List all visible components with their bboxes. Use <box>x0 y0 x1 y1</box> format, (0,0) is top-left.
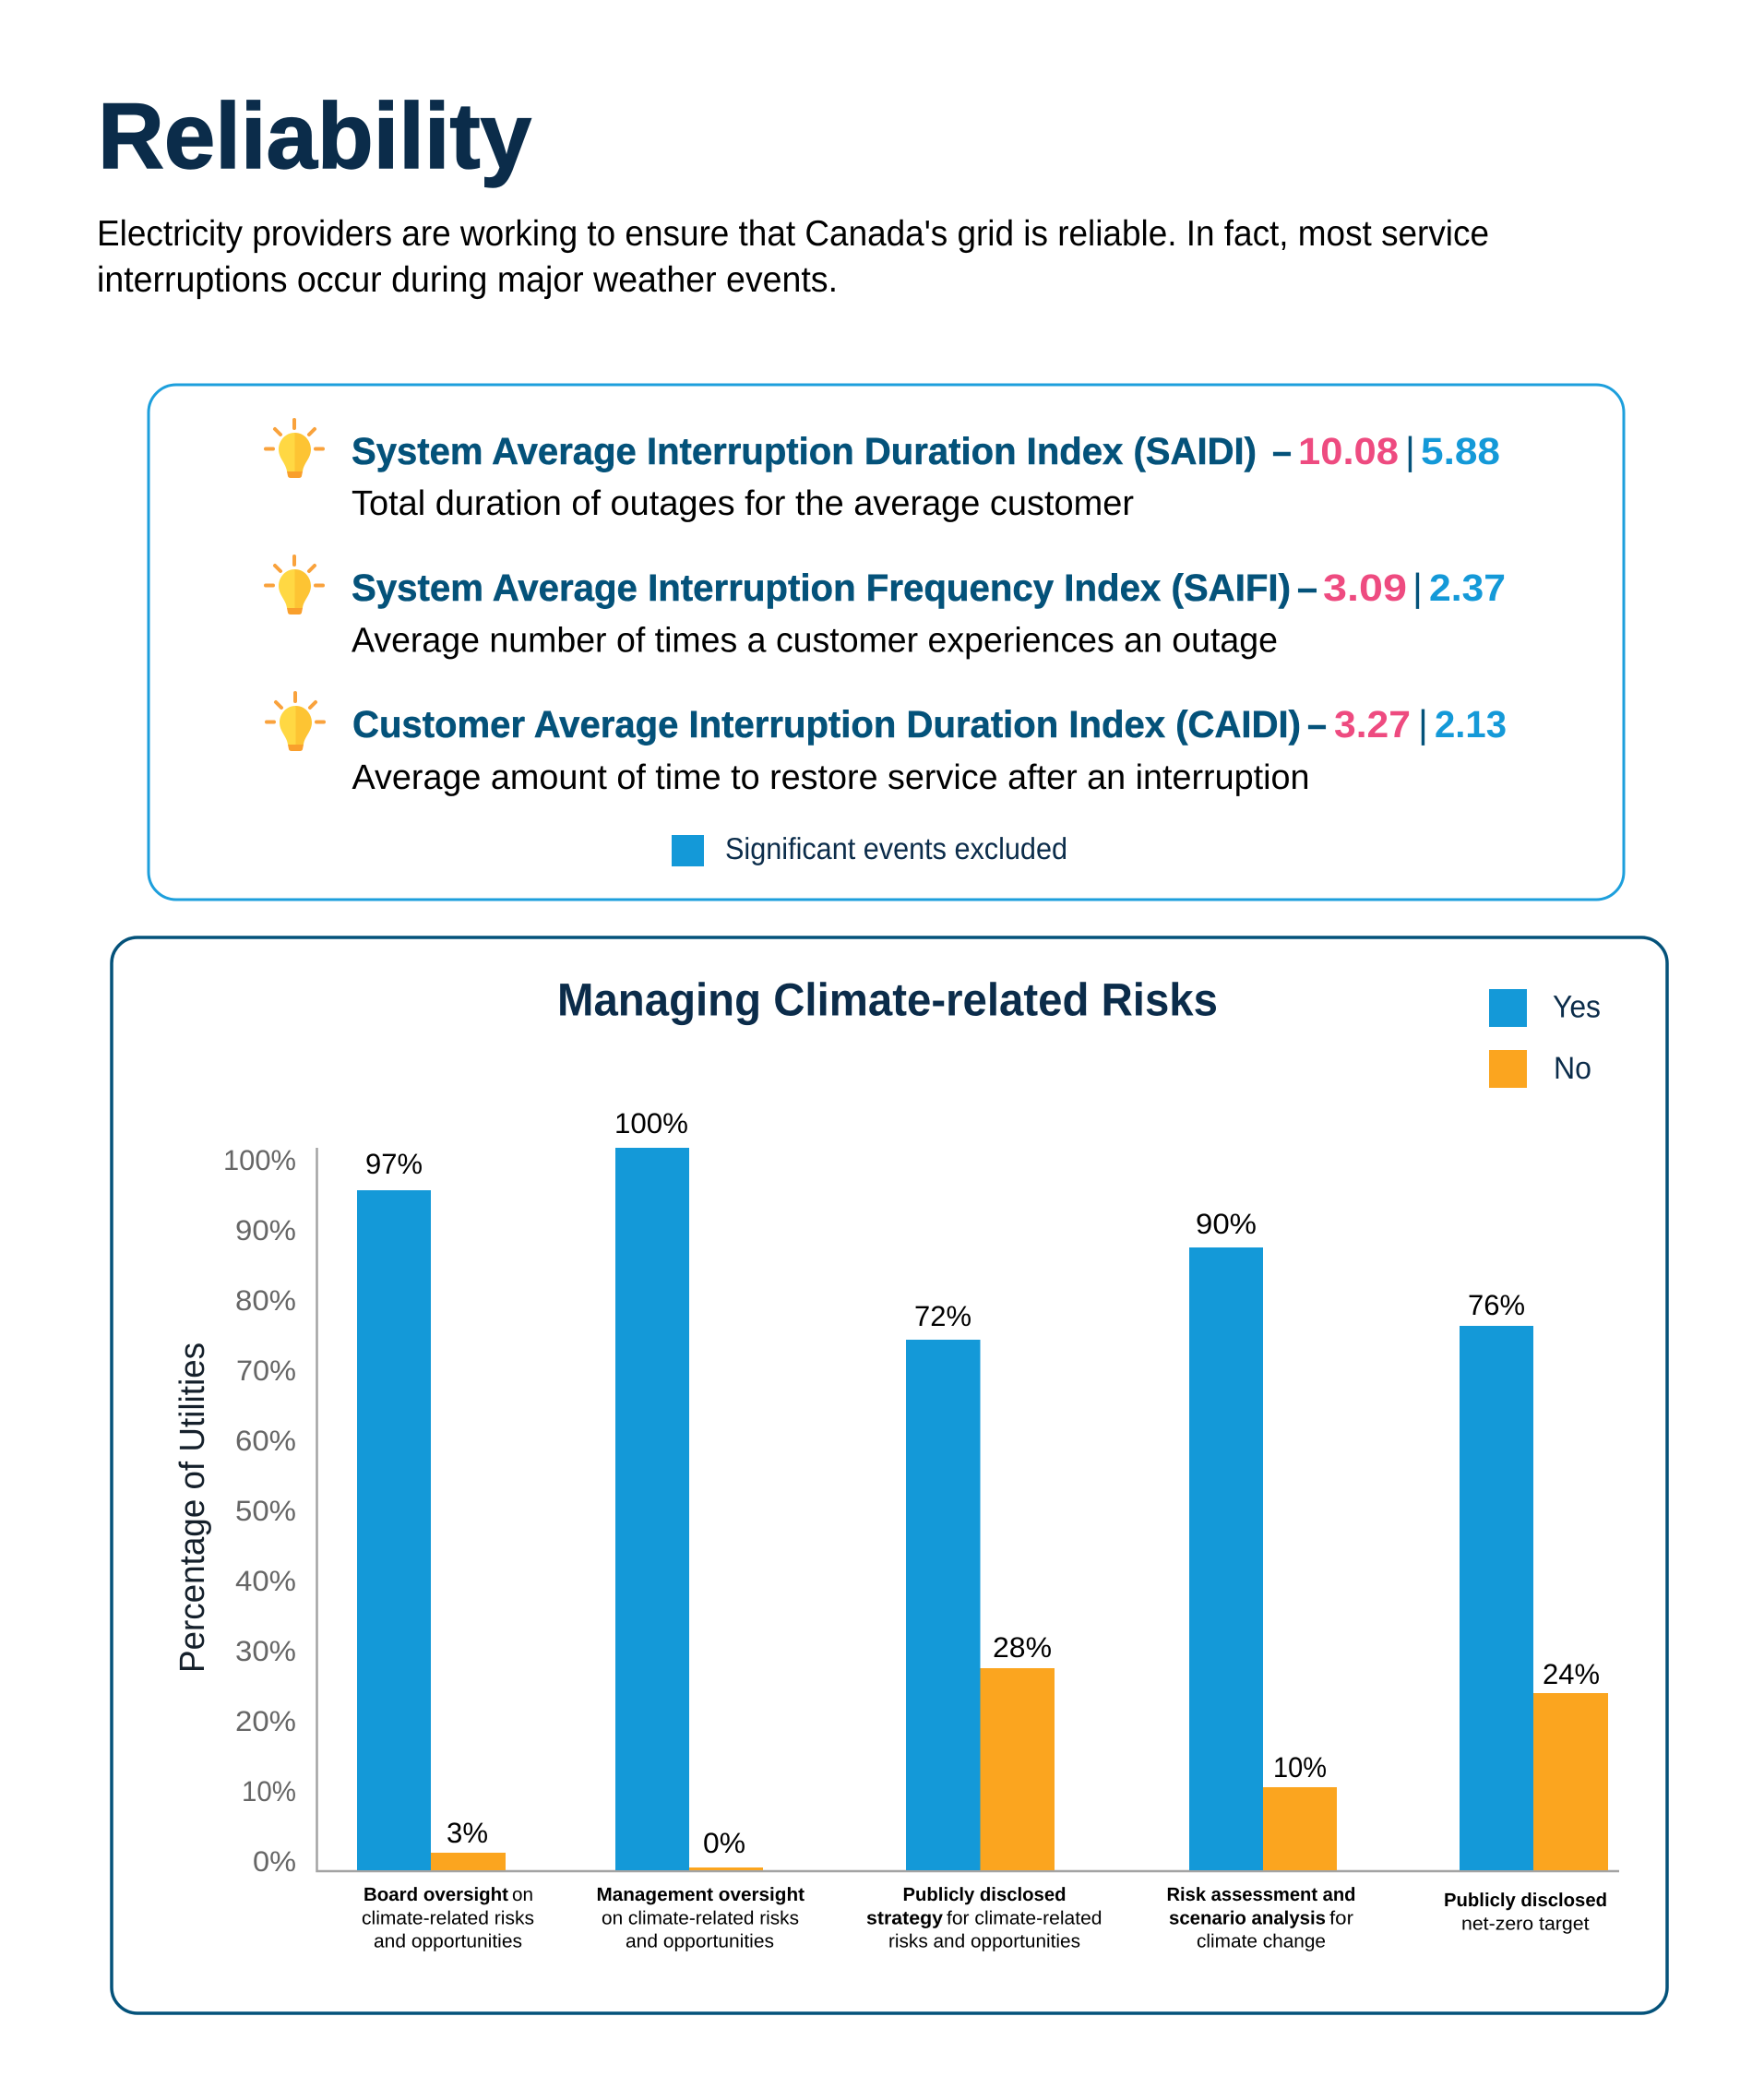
x label: management oversight: Management oversight <box>596 1884 805 1905</box>
y axis labels: 10% <box>242 1775 296 1808</box>
x label: risk assessment: climate change <box>1197 1930 1326 1952</box>
y axis labels: 30% <box>235 1635 296 1667</box>
panel: managing climate-related risks <box>112 937 1667 2013</box>
x label: risk assessment: scenario analysis <box>1169 1908 1326 1928</box>
y axis labels: 0% <box>253 1845 296 1878</box>
bars: risk assessment: 10% <box>1273 1751 1327 1784</box>
panel: reliability indices <box>149 385 1624 900</box>
description: CAIDI: Average amount of time to restore service after an interruption <box>352 758 1310 797</box>
heading: SAIFI: | <box>1412 566 1423 609</box>
x label: publicly disclosed strategy: Publicly disclosed <box>902 1884 1067 1905</box>
bars: management oversight: 100% <box>614 1107 688 1139</box>
bars: net-zero target <box>1460 1289 1608 1870</box>
bars: risk assessment: 90% <box>1196 1208 1257 1240</box>
heading: SAIDI: System Average Interruption Duration Index (SAIDI) <box>352 430 1257 472</box>
x label: risk assessment: Risk assessment and <box>1166 1884 1356 1905</box>
icon: light bulb SAIFI <box>266 556 323 614</box>
heading: CAIDI: 3.27 <box>1334 703 1411 746</box>
bars: board oversight: 3% <box>447 1817 488 1849</box>
bars: management oversight <box>614 1107 763 1870</box>
heading: CAIDI: 2.13 <box>1435 703 1507 746</box>
y axis labels: 100% <box>223 1144 296 1176</box>
heading: CAIDI: – <box>1307 703 1327 746</box>
x label: publicly disclosed strategy: for climate-related <box>947 1908 1102 1928</box>
x label: board oversight: on <box>512 1884 533 1905</box>
bars: net-zero target: 76% <box>1468 1289 1525 1321</box>
x label: publicly disclosed strategy: risks and opportunities <box>888 1930 1080 1952</box>
heading: SAIDI: | <box>1405 429 1415 472</box>
y axis labels: 90% <box>235 1214 296 1247</box>
x label: net-zero target: net-zero target <box>1461 1914 1590 1934</box>
heading: SAIDI: 5.88 <box>1421 430 1500 472</box>
icon: light bulb CAIDI <box>267 693 324 751</box>
x label: net-zero target: Publicly disclosed <box>1444 1890 1607 1911</box>
heading: CAIDI: Customer Average Interruption Duration Index (CAIDI) <box>352 703 1301 746</box>
x label: net-zero target <box>1444 1890 1607 1934</box>
heading: SAIFI: System Average Interruption Frequency Index (SAIFI) <box>352 567 1291 609</box>
heading: SAIDI: – <box>1272 430 1292 472</box>
y axis title: Percentage of Utilities <box>173 1342 212 1673</box>
bars: net-zero target: 24% <box>1543 1658 1600 1690</box>
bars: publicly disclosed strategy <box>906 1300 1055 1870</box>
y axis labels: 80% <box>235 1284 296 1317</box>
y axis labels: 50% <box>235 1495 296 1527</box>
legend: no <box>1489 1050 1591 1088</box>
y axis labels: 70% <box>236 1354 296 1387</box>
x label: management oversight: and opportunities <box>626 1930 774 1952</box>
bars: publicly disclosed strategy: 72% <box>914 1300 971 1332</box>
heading: SAIFI: 2.37 <box>1429 567 1506 609</box>
heading: SAIDI: 10.08 <box>1298 430 1399 472</box>
heading: SAIFI: – <box>1297 567 1317 609</box>
x label: board oversight: climate-related risks <box>362 1908 534 1928</box>
bars: management oversight: 0% <box>703 1827 745 1859</box>
heading: CAIDI: | <box>1418 702 1428 746</box>
intro text: interruptions occur during major weather events. <box>97 260 838 300</box>
x label: board oversight: Board oversight <box>364 1884 508 1905</box>
intro text <box>97 214 1489 300</box>
y axis labels: 40% <box>235 1565 296 1597</box>
x label: management oversight <box>596 1884 805 1952</box>
y axis labels <box>223 1144 296 1878</box>
legend: yes <box>1489 989 1601 1027</box>
axes <box>317 1148 1619 1871</box>
chart title: Managing Climate-related Risks <box>557 974 1218 1026</box>
legend: yes: Yes <box>1553 989 1601 1024</box>
intro text: Electricity providers are working to ensure that Canada's grid is reliable. In fact, most service <box>97 214 1489 254</box>
bars: board oversight <box>357 1148 506 1870</box>
legend: no: No <box>1554 1051 1591 1086</box>
x label: risk assessment: for <box>1329 1908 1353 1928</box>
legend: significant events excluded: Significant events excluded <box>725 831 1067 865</box>
title: Reliability <box>98 85 531 188</box>
bars: publicly disclosed strategy: 28% <box>993 1631 1052 1664</box>
bars: board oversight: 97% <box>365 1148 423 1180</box>
description: SAIDI: Total duration of outages for the average customer <box>352 484 1134 523</box>
y axis labels: 20% <box>235 1705 296 1737</box>
icon: light bulb SAIDI <box>266 420 323 478</box>
x label: management oversight: on climate-related risks <box>602 1908 799 1928</box>
heading: SAIFI: 3.09 <box>1323 567 1407 609</box>
x label: board oversight <box>362 1884 534 1952</box>
x label: publicly disclosed strategy: strategy <box>866 1908 944 1928</box>
bars: risk assessment <box>1189 1208 1337 1870</box>
x label: risk assessment <box>1166 1884 1356 1952</box>
description: SAIFI: Average number of times a customer experiences an outage <box>352 622 1278 661</box>
y axis labels: 60% <box>235 1425 296 1457</box>
x label: publicly disclosed strategy <box>866 1884 1102 1952</box>
x label: board oversight: and opportunities <box>374 1930 522 1952</box>
